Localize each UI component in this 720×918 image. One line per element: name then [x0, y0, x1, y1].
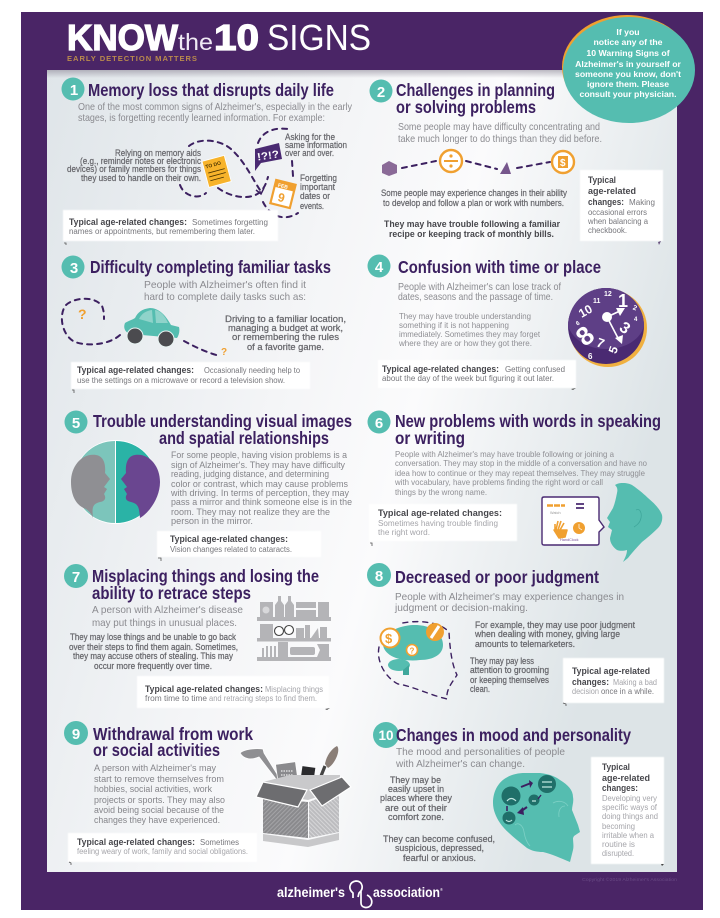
memory aids text: devices) or family members for things — [67, 164, 202, 174]
icon: word card speech bubble: HandClock — [560, 538, 579, 542]
icon: brain with dashed head: ? — [410, 646, 414, 656]
copyright: Copyright ©2019 Alzheimer's Association — [582, 876, 677, 882]
heading 7: ability to retrace steps — [92, 583, 251, 603]
icon: box of hobbies — [240, 746, 351, 847]
number badge 10 — [373, 722, 399, 748]
number badge 4 — [368, 254, 390, 278]
intro 1: stages, is forgetting recently learned information. For example: — [78, 113, 325, 124]
upset text: They may be — [390, 775, 441, 785]
typical box 3: Occasionally needing help to — [204, 366, 301, 375]
callout: consult your physician: someone you know, don't — [575, 69, 681, 79]
body 7: they may accuse others of stealing. This may — [73, 651, 234, 661]
title: EARLY DETECTION MATTERS — [67, 54, 197, 63]
body 4: immediately. Sometimes they may forget — [399, 329, 541, 339]
memory aids text: they used to handle on their own. — [81, 173, 201, 183]
typical box 10: routine is — [602, 840, 635, 849]
typical box 2: Typical — [588, 175, 616, 185]
heading 2 — [396, 80, 555, 117]
icon: car on dashed route: ? — [221, 347, 227, 358]
heading 7: Misplacing things and losing the — [92, 566, 319, 586]
typical box 2: age-related — [588, 186, 636, 196]
icon: word card speech bubble: Watch — [550, 511, 561, 515]
typical box 1 — [63, 210, 278, 245]
icon: car on dashed route: ? — [78, 306, 87, 322]
intro 7: A person with Alzheimer's disease — [92, 605, 243, 616]
typical box 2: occasional errors — [588, 208, 647, 217]
body 9 — [94, 763, 225, 826]
intro 3: hard to complete daily tasks such as: — [144, 292, 306, 303]
intro 8 — [394, 592, 624, 614]
icon: scrambled clock: 7 — [595, 335, 606, 351]
body 7: occur more frequently over time. — [94, 661, 212, 671]
number badge 2: 2 — [377, 84, 385, 101]
icon: calendar: 9 — [276, 190, 287, 205]
icon: brain with dashed head — [378, 622, 457, 699]
body 5: pass a mirror and think someone else is in the — [171, 497, 352, 508]
typical box 10: age-related — [602, 773, 650, 783]
icon: speech bubble — [255, 143, 282, 171]
body 5 — [170, 450, 352, 527]
number badge 6: 6 — [375, 415, 383, 432]
intro 7 — [92, 605, 243, 629]
body 4: where they are or how they got there. — [398, 338, 532, 348]
heading 6: New problems with words in speaking — [395, 411, 661, 431]
intro 1 — [78, 102, 353, 124]
typical box 1: Sometimes forgetting — [192, 218, 268, 227]
typical box 4: Typical age-related changes: — [382, 364, 499, 374]
typical box 6 — [369, 504, 517, 546]
typical box 7: and retracing steps to find them. — [209, 694, 317, 703]
example text: For example, they may use poor judgment — [475, 620, 636, 630]
driving text: Driving to a familiar location, — [225, 314, 346, 324]
typical box 10: irritable when a — [602, 831, 655, 840]
icon: scrambled clock: 12 — [604, 291, 612, 298]
upset text — [380, 775, 453, 822]
upset text: comfort zone. — [388, 812, 444, 822]
typical box 1: names or appointments, but remembering them later. — [69, 227, 255, 236]
typical box 8 — [563, 658, 664, 706]
heading 3: Difficulty completing familiar tasks — [90, 257, 331, 277]
typical box 8: changes: — [572, 677, 609, 687]
callout: consult your physician: ignore them. Please — [587, 79, 669, 89]
heading 6: or writing — [395, 428, 465, 448]
body 9: A person with Alzheimer's may — [94, 763, 216, 774]
asking text: Asking for the — [285, 132, 335, 142]
trouble text: They may have trouble following a familiar — [384, 219, 561, 229]
typical box 10: Typical — [602, 762, 630, 772]
example text — [474, 620, 636, 649]
memory aids text — [67, 148, 202, 183]
driving text — [225, 314, 346, 352]
heading 4: Confusion with time or place — [398, 257, 601, 277]
icon: brain with dashed head: $ — [385, 631, 393, 646]
panel: sign 6 words — [368, 410, 662, 562]
callout: consult your physician — [562, 15, 695, 123]
number badge 3 — [62, 256, 84, 278]
body 9: changes they have experienced. — [94, 815, 220, 826]
asking text: same information — [285, 140, 347, 150]
typical box 10: becoming — [602, 822, 635, 831]
panel: sign 10 mood — [373, 722, 664, 866]
typical box 10: changes: — [602, 783, 638, 793]
grooming text: They may pay less — [470, 656, 535, 666]
callout: consult your physician: If you — [616, 27, 640, 37]
number badge 1 — [62, 78, 84, 100]
icon: head with moods — [493, 773, 580, 862]
body 9: avoid being social because of the — [94, 805, 224, 816]
typical box 7 — [137, 676, 330, 710]
trouble text — [384, 219, 561, 239]
typical box 4 — [378, 360, 576, 390]
icon: car on dashed route — [62, 299, 227, 358]
body 4: something if it is not happening — [399, 320, 509, 330]
typical box 6: the right word. — [378, 528, 430, 537]
heading 6 — [395, 411, 661, 448]
footer logo: alzheimer's — [277, 885, 345, 900]
icon: scrambled clock: 8 — [570, 320, 600, 352]
number badge 3: 3 — [70, 260, 78, 277]
callout: consult your physician: consult your physician. — [579, 89, 677, 99]
number badge 8 — [367, 563, 391, 587]
title: 10 — [214, 17, 259, 58]
typical box 9: Typical age-related changes: — [77, 837, 195, 847]
typical box 2: checkbook. — [588, 226, 627, 235]
panel: sign 5 visual images — [64, 410, 352, 561]
typical box 4: Getting confused — [505, 365, 565, 374]
memory aids text: Relying on memory aids — [115, 148, 202, 158]
icon: calendar: FEB — [277, 183, 289, 191]
body 6: conversation. They may stop in the middle of a conversation and have no — [395, 458, 647, 468]
body 6: with vocabulary, have problems finding the right word or call — [394, 477, 603, 487]
title: KNOW — [67, 17, 178, 58]
example text: when dealing with money, giving large — [474, 629, 620, 639]
typical box 5 — [157, 531, 321, 561]
content panel — [47, 70, 677, 872]
grooming text: clean. — [470, 684, 490, 694]
icon: scrambled clock: 10 — [576, 302, 595, 321]
intro 8: judgment or decision-making. — [394, 603, 528, 614]
icon: speech bubble: !?!? — [256, 149, 280, 163]
panel: sign 2 planning — [370, 80, 663, 245]
typical box 7: Misplacing things — [265, 685, 323, 694]
typical box 3 — [71, 362, 310, 393]
body 5: sign of Alzheimer's. They may have difficulty — [171, 460, 345, 471]
plan text — [381, 188, 568, 208]
body 7 — [69, 632, 238, 671]
icon row: shapes and math: $ — [560, 158, 566, 169]
number badge 6 — [368, 410, 390, 434]
panel: sign 8 judgment — [367, 563, 664, 706]
typical box 7: Typical age-related changes: — [145, 684, 263, 694]
confused text: fearful or anxious. — [403, 853, 476, 863]
body 6: things by the wrong name. — [395, 487, 487, 497]
panel: sign 7 misplacing — [64, 564, 331, 710]
heading 2: Challenges in planning — [396, 80, 555, 100]
number badge 4: 4 — [375, 259, 384, 276]
body 7: over their steps to find them again. Sometimes, — [69, 642, 238, 652]
intro 3 — [144, 280, 306, 303]
heading 10: Changes in mood and personality — [396, 725, 631, 745]
typical box 2 — [580, 170, 663, 245]
heading 9: Withdrawal from work — [93, 724, 253, 744]
icon: scrambled clock: 11 — [593, 298, 601, 305]
icon: scrambled clock: 6 — [575, 320, 582, 327]
heading 8: Decreased or poor judgment — [395, 567, 599, 587]
heading 5 — [93, 411, 352, 448]
number badge 10: 10 — [378, 728, 394, 743]
body 6: People with Alzheimer's may have trouble following or joining a — [395, 449, 614, 459]
typical box 6: Typical age-related changes: — [378, 508, 502, 518]
confused text: They can become confused, — [383, 834, 495, 844]
intro 1: One of the most common signs of Alzheimer's, especially in the early — [78, 102, 353, 113]
title — [67, 17, 371, 63]
footer logo: ® — [440, 887, 443, 892]
heading 5: and spatial relationships — [159, 428, 329, 448]
heading 5: Trouble understanding visual images — [93, 411, 352, 431]
confused text — [383, 834, 495, 863]
intro 4: dates, seasons and the passage of time. — [398, 292, 553, 303]
typical box 9: Sometimes — [200, 838, 239, 847]
body 4: They may have trouble understanding — [399, 311, 531, 321]
upset text: easily upset in — [388, 784, 444, 794]
intro 10: The mood and personalities of people — [396, 747, 565, 758]
body 5: with driving. In terms of perception, they may — [170, 488, 349, 499]
body 7: They may lose things and be unable to go back — [70, 632, 237, 642]
typical box 10: Developing very — [602, 794, 657, 803]
dashed memory path — [180, 129, 298, 217]
intro 4: People with Alzheimer's can lose track of — [398, 282, 561, 293]
typical box 6: Sometimes having trouble finding — [378, 519, 498, 528]
forgetting text — [300, 173, 337, 211]
number badge 2 — [370, 80, 392, 102]
plan text: Some people may experience changes in their ability — [381, 188, 568, 198]
example text: amounts to telemarketers. — [475, 639, 575, 649]
typical box 2: changes: — [588, 197, 624, 207]
typical box 2: Making — [629, 198, 655, 207]
panel: sign 1 memory loss — [62, 78, 353, 245]
heading 2: or solving problems — [396, 97, 536, 117]
icon: scrambled clock — [568, 288, 647, 367]
icon: scrambled clock: 5 — [606, 344, 621, 355]
typical box 8: once in a while. — [601, 687, 654, 696]
typical box 8: Typical age-related — [572, 666, 650, 676]
body 5: For some people, having vision problems is a — [171, 450, 348, 461]
typical box 10: specific ways of — [602, 803, 658, 812]
upset text: are out of their — [385, 803, 447, 813]
number badge 5: 5 — [72, 415, 80, 432]
icon: to do note: TO DO — [205, 161, 222, 170]
icon: mirrored faces — [71, 440, 160, 524]
callout: consult your physician: Alzheimer's in yourself or — [575, 59, 682, 69]
callout: consult your physician: notice any of the — [593, 37, 663, 47]
icon: scrambled clock: 3 — [616, 319, 633, 338]
number badge 5 — [64, 410, 88, 434]
icon: word card speech bubble — [542, 497, 604, 545]
typical box 2: when balancing a — [587, 217, 649, 226]
icon: scrambled clock: 6 — [588, 352, 593, 361]
intro 2 — [398, 122, 602, 145]
typical box 5: Typical age-related changes: — [170, 534, 288, 544]
heading 9 — [93, 724, 253, 760]
intro 8: People with Alzheimer's may experience changes in — [395, 592, 624, 603]
title: the — [178, 29, 213, 55]
body 9: projects or sports. They may also — [94, 795, 225, 806]
typical box 10: disrupted. — [602, 849, 634, 858]
typical box 3: Typical age-related changes: — [77, 365, 194, 375]
heading 9: or social activities — [93, 740, 220, 760]
panel: sign 4 time or place — [368, 254, 647, 390]
forgetting text: Forgetting — [300, 173, 337, 183]
icon: scrambled clock: 1 — [618, 291, 628, 311]
number badge 9 — [64, 721, 88, 745]
upset text: places where they — [380, 793, 453, 803]
typical box 5: Vision changes related to cataracts. — [170, 545, 292, 554]
driving text: or remembering the rules — [232, 332, 340, 342]
typical box 9: feeling weary of work, family and social obligations. — [77, 847, 248, 856]
intro 3: People with Alzheimer's often find it — [144, 280, 306, 291]
typical box 9 — [68, 833, 257, 865]
body 5: color or contrast, which may cause problems — [171, 479, 348, 490]
typical box 7: from time to time — [145, 694, 208, 703]
body 9: start to remove themselves from — [94, 774, 224, 785]
icon: profile head — [607, 483, 662, 562]
heading 7 — [92, 566, 319, 603]
memory aids text: (e.g., reminder notes or electronic — [80, 156, 202, 166]
intro 7: may put things in unusual places. — [92, 618, 237, 629]
number badge 7: 7 — [72, 569, 80, 586]
body 4 — [398, 311, 541, 348]
footer logo: association — [373, 885, 440, 900]
grooming text: attention to grooming — [470, 665, 549, 675]
forgetting text: dates or — [300, 191, 330, 201]
trouble text: recipe or keeping track of monthly bills. — [389, 229, 554, 239]
heading 1: Memory loss that disrupts daily life — [88, 80, 334, 100]
driving text: managing a budget at work, — [228, 323, 343, 333]
title: SIGNS — [267, 17, 371, 58]
typical box 4: about the day of the week but figuring it out later. — [382, 374, 554, 383]
body 5: room. They may not realize they are the — [171, 507, 330, 518]
intro 2: Some people may have difficulty concentrating and — [398, 122, 600, 133]
plan text: to develop and follow a plan or work with numbers. — [383, 198, 564, 208]
typical box 10 — [591, 757, 664, 866]
icon: to do note — [202, 155, 231, 187]
number badge 9: 9 — [72, 726, 80, 743]
icon: scrambled clock: 4 — [634, 317, 638, 323]
typical box 8: decision — [572, 687, 599, 696]
forgetting text: events. — [300, 201, 324, 211]
panel: sign 3 familiar tasks — [62, 256, 346, 393]
number badge 1: 1 — [70, 82, 78, 99]
typical box 8: Making a bad — [613, 678, 657, 687]
number badge 8: 8 — [375, 568, 383, 585]
icon: cluttered shelves — [257, 596, 331, 661]
typical box 3: use the settings on a microwave or record a television show. — [77, 376, 285, 385]
typical box 10: doing things and — [602, 812, 658, 821]
asking text — [285, 132, 347, 158]
intro 2: take much longer to do things than they did before. — [398, 134, 602, 145]
confused text: suspicious, depressed, — [395, 843, 484, 853]
asking text: over and over. — [285, 148, 334, 158]
forgetting text: important — [300, 182, 336, 192]
intro 10 — [395, 747, 565, 770]
body 6 — [394, 449, 647, 497]
icon: calendar — [270, 180, 296, 208]
body 5: reading, judging distance, and determining — [171, 469, 329, 480]
panel: sign 9 withdrawal — [64, 721, 351, 865]
intro 10: with Alzheimer's can change. — [395, 759, 525, 770]
grooming text — [470, 656, 550, 694]
intro 4 — [398, 282, 561, 303]
grooming text: or keeping themselves — [470, 675, 550, 685]
icon: scrambled clock: 2 — [632, 304, 638, 312]
body 5: person in the mirror. — [171, 516, 253, 527]
icon row: shapes and math — [382, 150, 574, 176]
callout: consult your physician: 10 Warning Signs of — [586, 48, 670, 58]
driving text: of a favorite game. — [247, 342, 324, 352]
body 6: idea how to continue or they may repeat themselves. They may struggle — [395, 468, 645, 478]
typical box 1: Typical age-related changes: — [69, 217, 187, 227]
number badge 7 — [64, 564, 88, 588]
body 9: hobbies, social activities, work — [94, 784, 212, 795]
footer logo — [277, 881, 443, 907]
